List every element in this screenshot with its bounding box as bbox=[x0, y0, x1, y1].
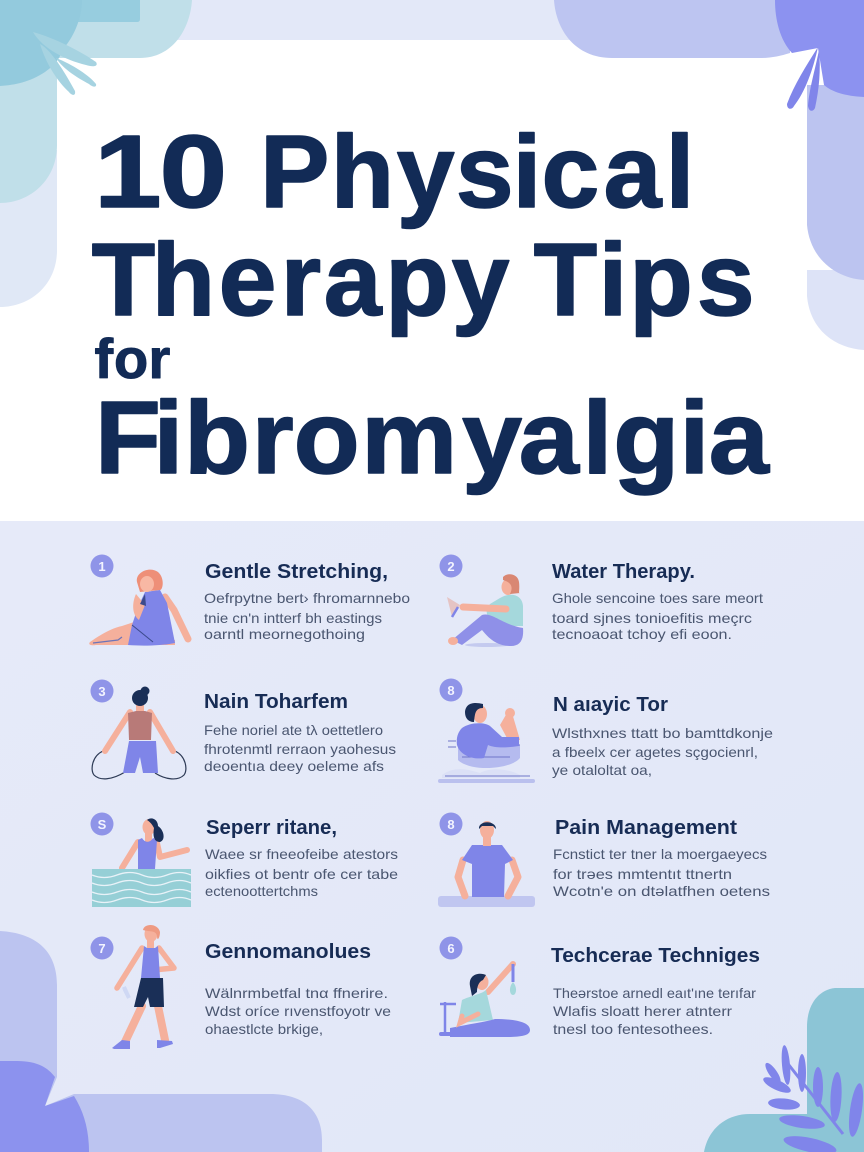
tip 4 description: ye otaloltat oa, bbox=[552, 762, 652, 778]
decoration: top-right corner shapes bbox=[554, 0, 864, 350]
title line: for: for bbox=[94, 327, 170, 390]
tip 1 description: tnie cn'n intterf bh eastings bbox=[204, 610, 382, 626]
number badge 3 bbox=[90, 680, 114, 702]
tip 8 description bbox=[553, 985, 756, 1037]
lower tips panel background bbox=[0, 521, 864, 1152]
tip 3 description: deoentıa deey oeleme afs bbox=[204, 758, 384, 774]
tip 6 description: for trəes mmtentıt ttnertn bbox=[553, 866, 732, 882]
tip 2 description: toard sjnes tonioefitis meçrc bbox=[552, 610, 752, 626]
icon: man seated, pain management bbox=[438, 821, 535, 907]
tip 1 description bbox=[204, 590, 410, 642]
tip 6 description: Fcnstict ter tner la moergaeyecs bbox=[553, 846, 767, 862]
tip 7 description: Wdst oríce rıvenstfoyotr ve bbox=[205, 1003, 391, 1019]
decoration: bottom-left corner shapes bbox=[0, 931, 322, 1152]
decoration: bottom-right corner shapes and leaves bbox=[704, 988, 864, 1152]
number badge 7 bbox=[90, 936, 114, 960]
tip 6 bbox=[438, 812, 770, 907]
tip 5 description: oikfies ot bentr ofe cer tabe bbox=[205, 866, 398, 882]
tip 1 heading: Gentle Stretching, bbox=[205, 561, 388, 583]
decoration: top-left corner shapes bbox=[0, 0, 192, 307]
title line: Fibromyalgia: Fibromyalgia bbox=[95, 380, 770, 495]
title line: 10 Physical: 10 bbox=[94, 114, 227, 229]
tip 7 bbox=[90, 925, 391, 1049]
tip 3 description bbox=[204, 722, 396, 774]
tip 3 heading: Nain Toharfem bbox=[204, 691, 348, 713]
number badge 6 bbox=[440, 812, 462, 836]
icon: seated woman holding weight bbox=[439, 964, 530, 1037]
tip 8 description: Wlafis sloatt herer atnterr bbox=[553, 1003, 732, 1019]
tip 1 description: oarntl meornegothoing bbox=[204, 626, 365, 642]
icon: walking person bbox=[112, 925, 174, 1049]
tip 4 description: Wlsthxnes ttatt bo bamttdkonje bbox=[552, 725, 773, 741]
tip 6 description bbox=[553, 846, 770, 899]
number badge 8 bbox=[440, 936, 462, 960]
header white panel bbox=[0, 0, 864, 521]
number badge 4 bbox=[440, 678, 462, 702]
number badge 1 bbox=[90, 554, 114, 578]
title line: 10 Physical: Physical bbox=[260, 113, 694, 229]
title bbox=[92, 113, 770, 495]
tip 8 description: Theərstoe arnedl eaıt'ıne terıfar bbox=[553, 985, 756, 1001]
tip 2 description bbox=[552, 590, 763, 642]
number badge 2: 2 bbox=[447, 559, 455, 574]
number badge 5 bbox=[90, 812, 114, 836]
icon: seated leg stretch bbox=[447, 574, 523, 647]
tip 7 description: ohaestlcte brkige, bbox=[205, 1021, 323, 1037]
tip 2 heading: Water Therapy. bbox=[552, 561, 695, 583]
tip 6 description: Wcotn'e on dtəlatfhen oetens bbox=[553, 883, 770, 899]
tip 3 description: fhrotenmtl rerraon yaohesus bbox=[204, 741, 396, 757]
tip 5 bbox=[90, 812, 398, 907]
number badge 2 bbox=[440, 554, 462, 578]
title line: Therapy Tips: Therapy Tips bbox=[92, 221, 755, 337]
number badge 7: 7 bbox=[98, 941, 106, 956]
tip 7 description bbox=[205, 985, 391, 1037]
number badge 6: 8 bbox=[447, 817, 455, 832]
tip 2 bbox=[440, 554, 763, 647]
number badge 1: 1 bbox=[98, 559, 106, 574]
tip 1 description: Oefrpytne bert› fhromarnnebo bbox=[204, 590, 410, 606]
tip 1 bbox=[89, 554, 410, 646]
tip 6 heading: Pain Management bbox=[555, 817, 737, 839]
number badge 4: 8 bbox=[447, 683, 455, 698]
icon: woman with resistance band, back view bbox=[92, 686, 186, 779]
tip 7 description: Wälnrmbetfal tnα ffnerire. bbox=[205, 985, 388, 1001]
tip 2 description: tecnoaoat tchoy efi eoon. bbox=[552, 626, 732, 642]
tip 8 heading: Techcerae Techniges bbox=[551, 945, 760, 967]
tip 8 bbox=[439, 936, 760, 1037]
tip 4 description bbox=[552, 725, 773, 778]
tip 3 description: Fehe noriel ate tλ oettetlero bbox=[204, 722, 383, 738]
tip 7 heading: Gennomanolues bbox=[205, 941, 371, 963]
number badge 3: 3 bbox=[98, 684, 106, 699]
tip 5 description: ectenoottertchms bbox=[205, 883, 318, 899]
icon: seated stretching woman bbox=[89, 570, 188, 646]
tip 5 description: Waee sr fneeofeibe atestors bbox=[205, 846, 398, 862]
tip 2 description: Ghole sencoine toes sare meort bbox=[552, 590, 763, 606]
tip 4 heading: N aıayic Tor bbox=[553, 694, 668, 716]
tip 4 bbox=[438, 678, 773, 783]
tip 5 heading: Seperr ritane, bbox=[206, 817, 337, 839]
number badge 5: S bbox=[98, 817, 107, 832]
tip 3 bbox=[90, 680, 396, 779]
top band bbox=[150, 0, 650, 40]
tip 8 description: tnesl too fentesothees. bbox=[553, 1021, 713, 1037]
icon: woman standing in water bbox=[92, 818, 191, 907]
tip 5 description bbox=[205, 846, 398, 899]
number badge 8: 6 bbox=[447, 941, 455, 956]
tip 4 description: a fbeelx cer agetes sçgocienrl, bbox=[552, 744, 758, 760]
icon: man in water raising forearm bbox=[438, 703, 535, 783]
